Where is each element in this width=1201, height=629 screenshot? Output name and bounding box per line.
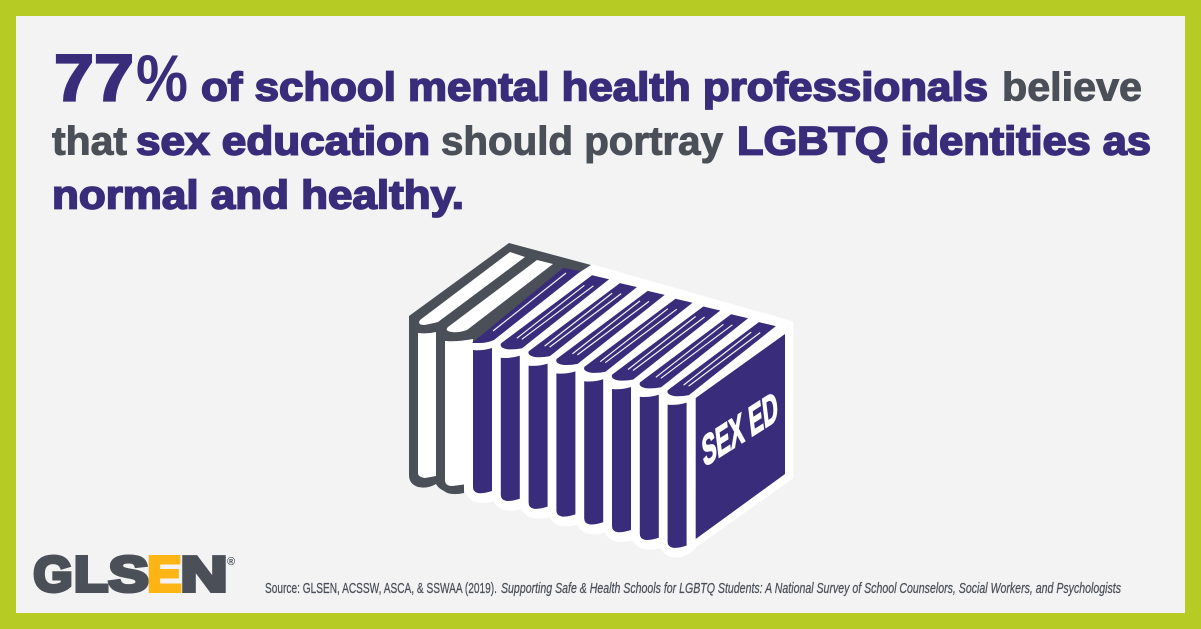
heading line 3: normal and healthy. [52,174,464,218]
GLSEN logo: N [180,547,228,602]
heading line 2: sex education [136,120,430,164]
heading line 1: of school mental health professionals [201,66,988,110]
heading line 2: that [52,120,127,164]
front book cover [696,334,785,539]
illustration: row of books [409,243,792,558]
heading line 2: should portray [441,120,724,164]
GLSEN logo: S [109,547,149,602]
GLSEN logo: L [74,547,108,602]
big number 77%: % [136,41,188,115]
GLSEN logo: G [34,547,72,602]
purple book spines and page tops [472,268,776,548]
big number 77%: 77 [54,40,134,114]
heading [52,40,1151,218]
grey book tops and spines [409,243,591,494]
heading line 2 [52,120,1151,164]
GLSEN logo: E [147,547,181,602]
source citation [265,581,1121,597]
heading line 2: LGBTQ identities as [737,120,1151,164]
GLSEN logo [34,547,235,602]
GLSEN logo: ® [227,556,235,568]
white backing of books [445,265,792,558]
book cover title: SEX ED [700,383,780,477]
heading line 1: believe [1002,66,1142,110]
source citation: Source: GLSEN, ACSSW, ASCA, & SSWAA (2019). [265,581,497,597]
big number 77% [54,40,188,115]
